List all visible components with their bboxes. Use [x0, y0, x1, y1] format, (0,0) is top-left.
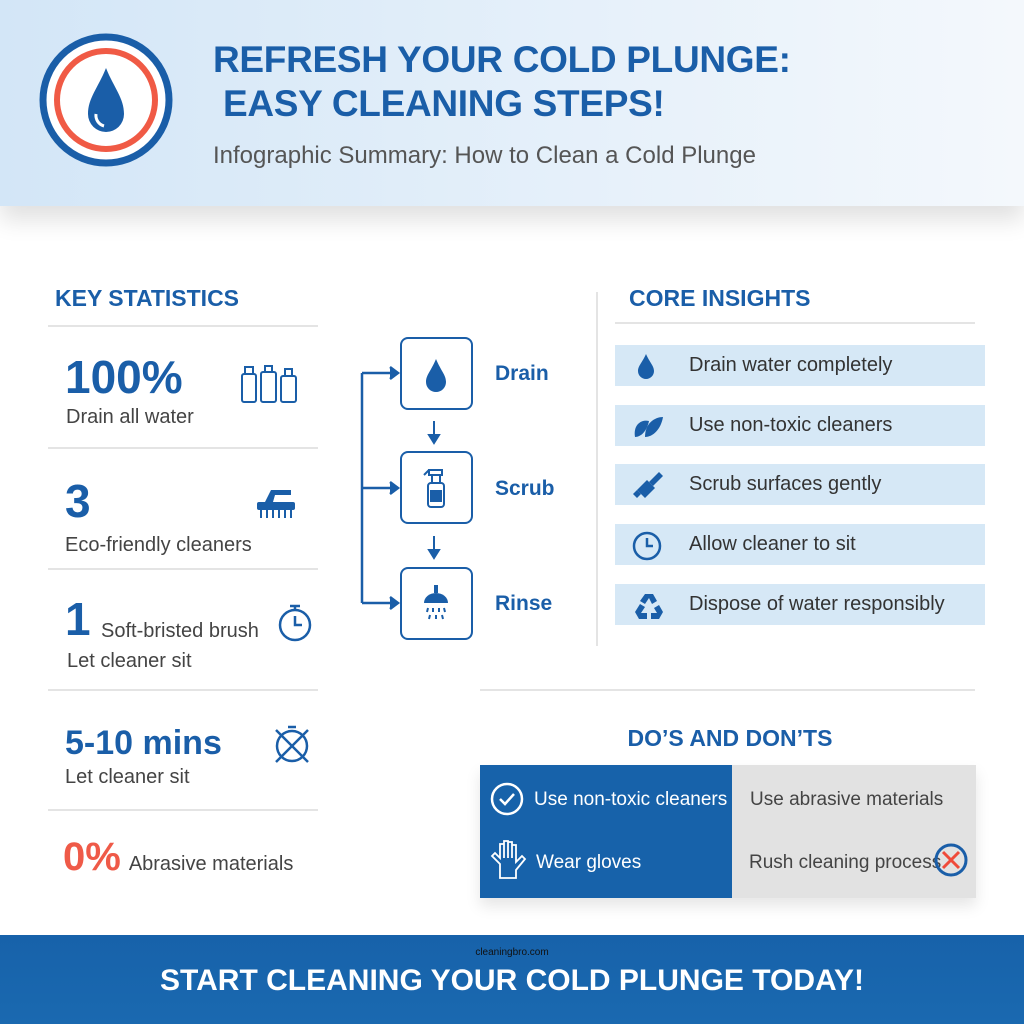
column: do's: Wear gloves [536, 852, 641, 873]
stat: 1: 1 [65, 593, 91, 645]
call to action: START CLEANING YOUR COLD PLUNGE TODAY! [160, 964, 864, 997]
stat: 3: 3 [65, 475, 91, 527]
flowchart: cleaning steps [360, 366, 441, 610]
column: don'ts: Use abrasive materials [750, 789, 943, 810]
label: scrub: Scrub [495, 477, 555, 500]
heading: key statistics: KEY STATISTICS [55, 285, 239, 311]
icon: logo water drop [40, 34, 172, 166]
step: scrub [400, 451, 473, 524]
stat: 100%: 100% [65, 351, 183, 403]
stat: 3 [65, 475, 295, 556]
insight 4 [615, 524, 985, 565]
heading: core insights: CORE INSIGHTS [629, 285, 810, 311]
insight 2 [615, 405, 985, 446]
label: drain: Drain [495, 362, 549, 385]
subtitle: Infographic Summary: How to Clean a Cold Plunge [213, 142, 756, 169]
panel: key statistics [48, 285, 318, 879]
column: don'ts [732, 765, 976, 898]
insight 1: Drain water completely [689, 354, 892, 376]
stat: 1: Soft-bristed brush [101, 620, 259, 642]
table: do's and don'ts [480, 765, 976, 898]
insight 4: Allow cleaner to sit [689, 533, 856, 555]
insight 1 [615, 345, 985, 386]
step: rinse [400, 567, 473, 640]
column: don'ts: Rush cleaning process [749, 852, 941, 873]
insight 5 [615, 584, 985, 625]
heading: do's and don'ts: DO’S AND DON’TS [628, 725, 832, 751]
stat: 3: Eco-friendly cleaners [65, 534, 252, 556]
stat: 1 [65, 593, 312, 672]
header [0, 0, 1024, 206]
stat: 5-10 mins: Let cleaner sit [65, 766, 190, 788]
source text: cleaningbro.com [475, 947, 549, 958]
stat: 5-10 mins [65, 724, 309, 788]
label: rinse: Rinse [495, 592, 552, 615]
stat: 1: Let cleaner sit [67, 650, 192, 672]
stat: 0%: 0% Abrasive materials [63, 835, 293, 879]
arrows: down [427, 421, 441, 560]
footer banner [0, 935, 1024, 1024]
panel: core insights [615, 285, 985, 625]
insight 5: Dispose of water responsibly [689, 593, 945, 615]
title: EASY CLEANING STEPS! [223, 83, 664, 124]
insight 2: Use non-toxic cleaners [689, 414, 892, 436]
insight 3: Scrub surfaces gently [689, 473, 881, 495]
insight 3 [615, 464, 985, 505]
arrow: left bracket [360, 366, 400, 610]
stat: 100% [65, 351, 297, 428]
title: REFRESH YOUR COLD PLUNGE: [213, 39, 791, 80]
column: do's: Use non-toxic cleaners [534, 789, 727, 810]
stat: 5-10 mins: 5-10 mins [65, 724, 222, 762]
title [213, 39, 791, 124]
column: do's [480, 765, 732, 898]
stat: 100%: Drain all water [66, 406, 194, 428]
step: drain [400, 337, 473, 410]
